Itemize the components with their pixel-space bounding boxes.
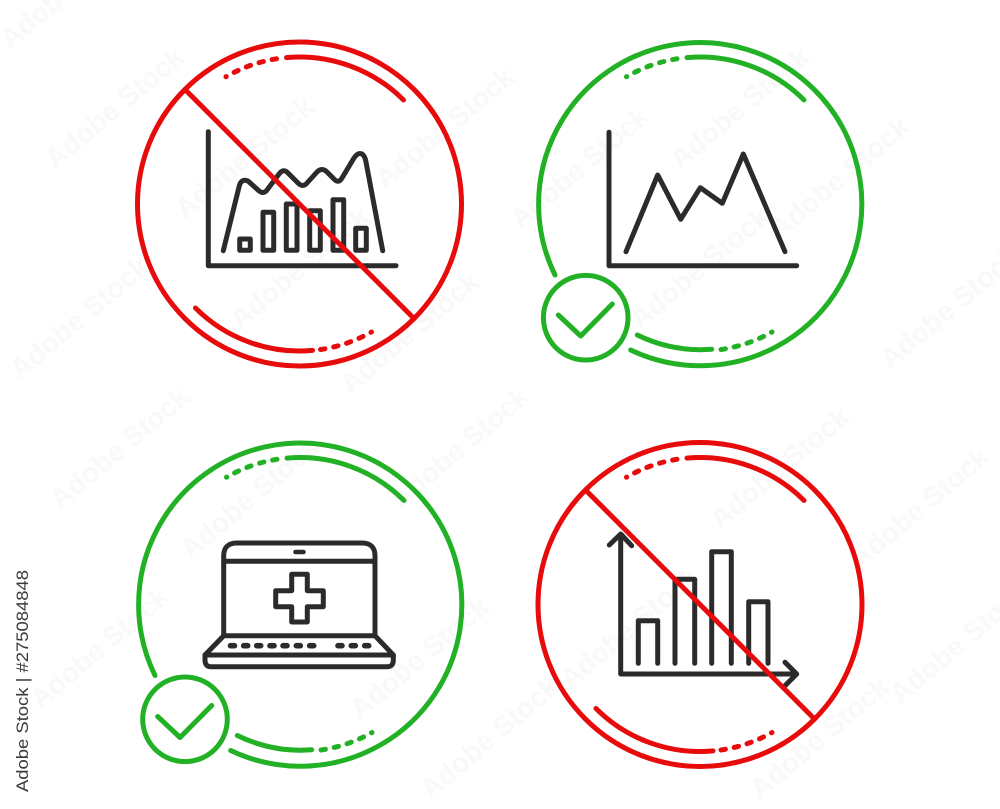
watermark pattern: Adobe Stock [744,671,895,805]
icon: green ring with check [539,43,862,366]
watermark pattern: Adobe Stock [369,61,520,195]
watermark pattern: Adobe Stock [174,431,325,565]
watermark pattern: Adobe Stock [664,41,815,175]
watermark pattern: Adobe Stock [169,91,320,225]
panel: prohibited bar chart [538,442,862,766]
icon: dark bar chart with arrows [609,534,797,686]
icon: dark mountain line chart [609,132,797,266]
icon: red prohibition ring [138,42,462,366]
watermark pattern: Adobe Stock [554,561,705,695]
icon: dark line and bar chart [208,132,396,266]
watermark pattern: Adobe Stock [704,401,855,535]
icon: dark laptop with medical cross [205,543,393,667]
watermark pattern: Adobe Stock [24,581,175,715]
watermark pattern: Adobe Stock [504,101,655,235]
icon: green ring with check [139,443,462,766]
panel: approved medical laptop [139,443,462,766]
watermark pattern: Adobe Stock [39,41,190,175]
watermark pattern: Adobe Stock [224,201,375,335]
watermark pattern: Adobe Stock [764,111,915,245]
icon: red prohibition ring [538,442,862,766]
watermark pattern: Adobe Stock [624,201,775,335]
panel: prohibited line-and-bar chart [138,42,462,366]
watermark pattern: Adobe Stock [4,251,155,385]
stock credit text: Adobe Stock | #275084848 [13,570,32,792]
watermark pattern: Adobe Stock [844,441,995,575]
watermark pattern: Adobe Stock [334,266,485,400]
panel: approved line chart [539,43,862,366]
watermark pattern: Adobe Stock [44,381,195,515]
watermark pattern: Adobe Stock [344,591,495,725]
watermark pattern: Adobe Stock [384,381,535,515]
watermark pattern: Adobe Stock [414,671,565,805]
